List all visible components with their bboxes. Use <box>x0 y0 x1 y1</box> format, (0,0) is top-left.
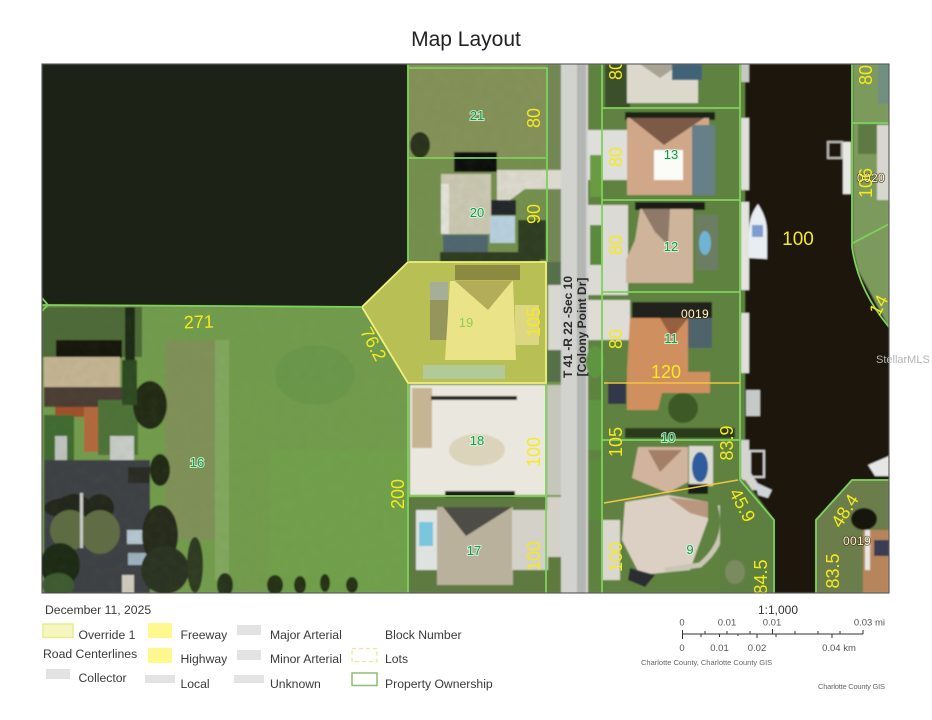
dimension labels: 200 <box>388 479 408 509</box>
legend: block number: Block Number <box>385 628 462 642</box>
legend: road centerlines heading: Road Centerlines <box>43 647 137 661</box>
date: December 11, 2025 <box>45 603 151 617</box>
lot 21 grass <box>408 64 547 158</box>
block numbers: 17 <box>467 543 481 558</box>
scale bar: 0.01 <box>710 643 729 654</box>
watermark: StellarMLS <box>876 354 930 366</box>
road labels <box>564 276 588 378</box>
lot 17 <box>408 497 547 593</box>
dimension labels: 80 <box>606 60 626 80</box>
legend: minor arterial <box>237 650 342 666</box>
block numbers: 11 <box>664 331 678 346</box>
lake <box>42 64 408 307</box>
dimension labels: 100 <box>606 542 626 572</box>
dimension labels: 105 <box>606 427 626 457</box>
southeast lot <box>816 480 889 593</box>
scale bar: 0.03 mi <box>854 618 885 628</box>
dimension labels: 48.4 <box>827 491 863 531</box>
legend: collector: Collector <box>78 671 127 685</box>
canal <box>745 64 889 593</box>
dimension labels: 100 <box>524 437 544 467</box>
attribution left: Charlotte County, Charlotte County GIS <box>641 658 772 667</box>
lot group numbers <box>681 171 885 548</box>
subject parcel 19 <box>362 262 546 383</box>
lot 18 construction <box>410 385 546 495</box>
scale bar: 0.01 <box>718 618 736 628</box>
scale bar: 0 <box>679 618 685 628</box>
dimension labels: 120 <box>651 362 681 382</box>
road labels: [Colony Point Dr] <box>575 278 589 376</box>
road <box>561 64 588 593</box>
scale ratio: 1:1,000 <box>758 603 798 617</box>
legend: freeway <box>148 623 228 642</box>
seawall <box>741 64 749 82</box>
lot group numbers: 0019 <box>843 534 871 548</box>
block numbers: 19 <box>459 315 473 330</box>
east side front lawn <box>588 64 745 593</box>
legend: property ownership <box>352 673 493 691</box>
legend: property ownership: Property Ownership <box>385 677 493 691</box>
southwest garden lot <box>720 480 774 593</box>
legend: unknown: Unknown <box>270 677 321 691</box>
legend: override 1: Override 1 <box>78 628 136 642</box>
parking lot <box>44 460 150 593</box>
dimension labels: 100 <box>782 229 814 250</box>
dimension labels: 100 <box>524 541 544 571</box>
legend: highway: Highway <box>180 652 228 666</box>
scale bar: 0 <box>679 643 685 654</box>
dimension labels: 90 <box>524 204 544 224</box>
lot lines <box>604 383 740 503</box>
block numbers: 12 <box>664 239 678 254</box>
moored boats and docks <box>746 390 760 416</box>
legend <box>43 603 493 691</box>
block numbers: 9 <box>686 542 694 557</box>
aerial imagery <box>40 64 889 597</box>
lot group numbers: 0019 <box>681 307 709 321</box>
dimension labels: 76.2 <box>356 324 390 364</box>
scale bar: 0.01 <box>763 618 781 628</box>
dimension labels: 84.5 <box>751 559 771 595</box>
block numbers: 13 <box>664 147 678 162</box>
block numbers: 10 <box>661 430 675 445</box>
dimension labels <box>183 60 892 595</box>
dimension labels: 80 <box>606 329 626 349</box>
house lot 9 <box>622 495 708 575</box>
house north of lot 13 <box>605 64 630 108</box>
tree line <box>142 505 178 565</box>
house lot 11 <box>632 302 712 318</box>
west field <box>42 307 408 593</box>
legend: major arterial <box>237 625 342 642</box>
aerial map <box>40 60 892 597</box>
house lot 10 <box>632 447 688 493</box>
dimension labels: 83.9 <box>717 425 737 461</box>
parcel lines <box>42 64 889 593</box>
scale bar: 0.02 <box>748 643 766 654</box>
dimension labels: 83.5 <box>823 553 843 589</box>
road labels: T 41 -R 22 -Sec 10 <box>561 276 575 378</box>
map frame <box>42 64 889 593</box>
title: Map Layout <box>411 28 521 51</box>
legend: local: Local <box>180 677 210 691</box>
lot group numbers: 0020 <box>857 171 885 185</box>
legend: highway <box>148 648 228 666</box>
block numbers: 20 <box>470 205 484 220</box>
scale bar: 0.04 km <box>822 643 856 654</box>
dimension labels: 45.9 <box>725 485 759 525</box>
boat <box>749 204 767 259</box>
legend: lots <box>352 648 408 666</box>
house lot 13 <box>625 112 715 120</box>
block numbers <box>190 108 694 558</box>
house lot 12 <box>635 202 705 210</box>
block numbers: 18 <box>470 433 484 448</box>
scale bar <box>679 618 885 654</box>
dimension labels: 80 <box>606 147 626 167</box>
dimension labels: 105 <box>524 307 544 337</box>
legend: override 1 <box>43 624 136 642</box>
dimension labels: 80 <box>606 235 626 255</box>
dimension labels: 271 <box>183 311 214 333</box>
dimension labels: 106 <box>856 168 876 198</box>
legend: unknown <box>234 675 321 691</box>
block numbers: 21 <box>470 108 484 123</box>
condo building and trees <box>42 307 142 357</box>
block numbers: 16 <box>190 455 204 470</box>
palms lot 10 <box>668 393 698 423</box>
legend: collector <box>46 669 127 685</box>
legend: major arterial: Major Arterial <box>270 628 342 642</box>
legend: minor arterial: Minor Arterial <box>270 652 342 666</box>
lot 20 <box>408 158 547 262</box>
legend: freeway: Freeway <box>180 628 228 642</box>
legend: local <box>145 675 210 691</box>
east bank <box>853 64 889 327</box>
driveways on road west side <box>547 385 561 495</box>
attribution right: Charlotte County GIS <box>818 682 885 691</box>
dimension labels: 14 <box>865 292 892 319</box>
dimension labels: 80 <box>856 65 876 85</box>
legend: lots: Lots <box>385 652 408 666</box>
dimension labels: 80 <box>524 108 544 128</box>
